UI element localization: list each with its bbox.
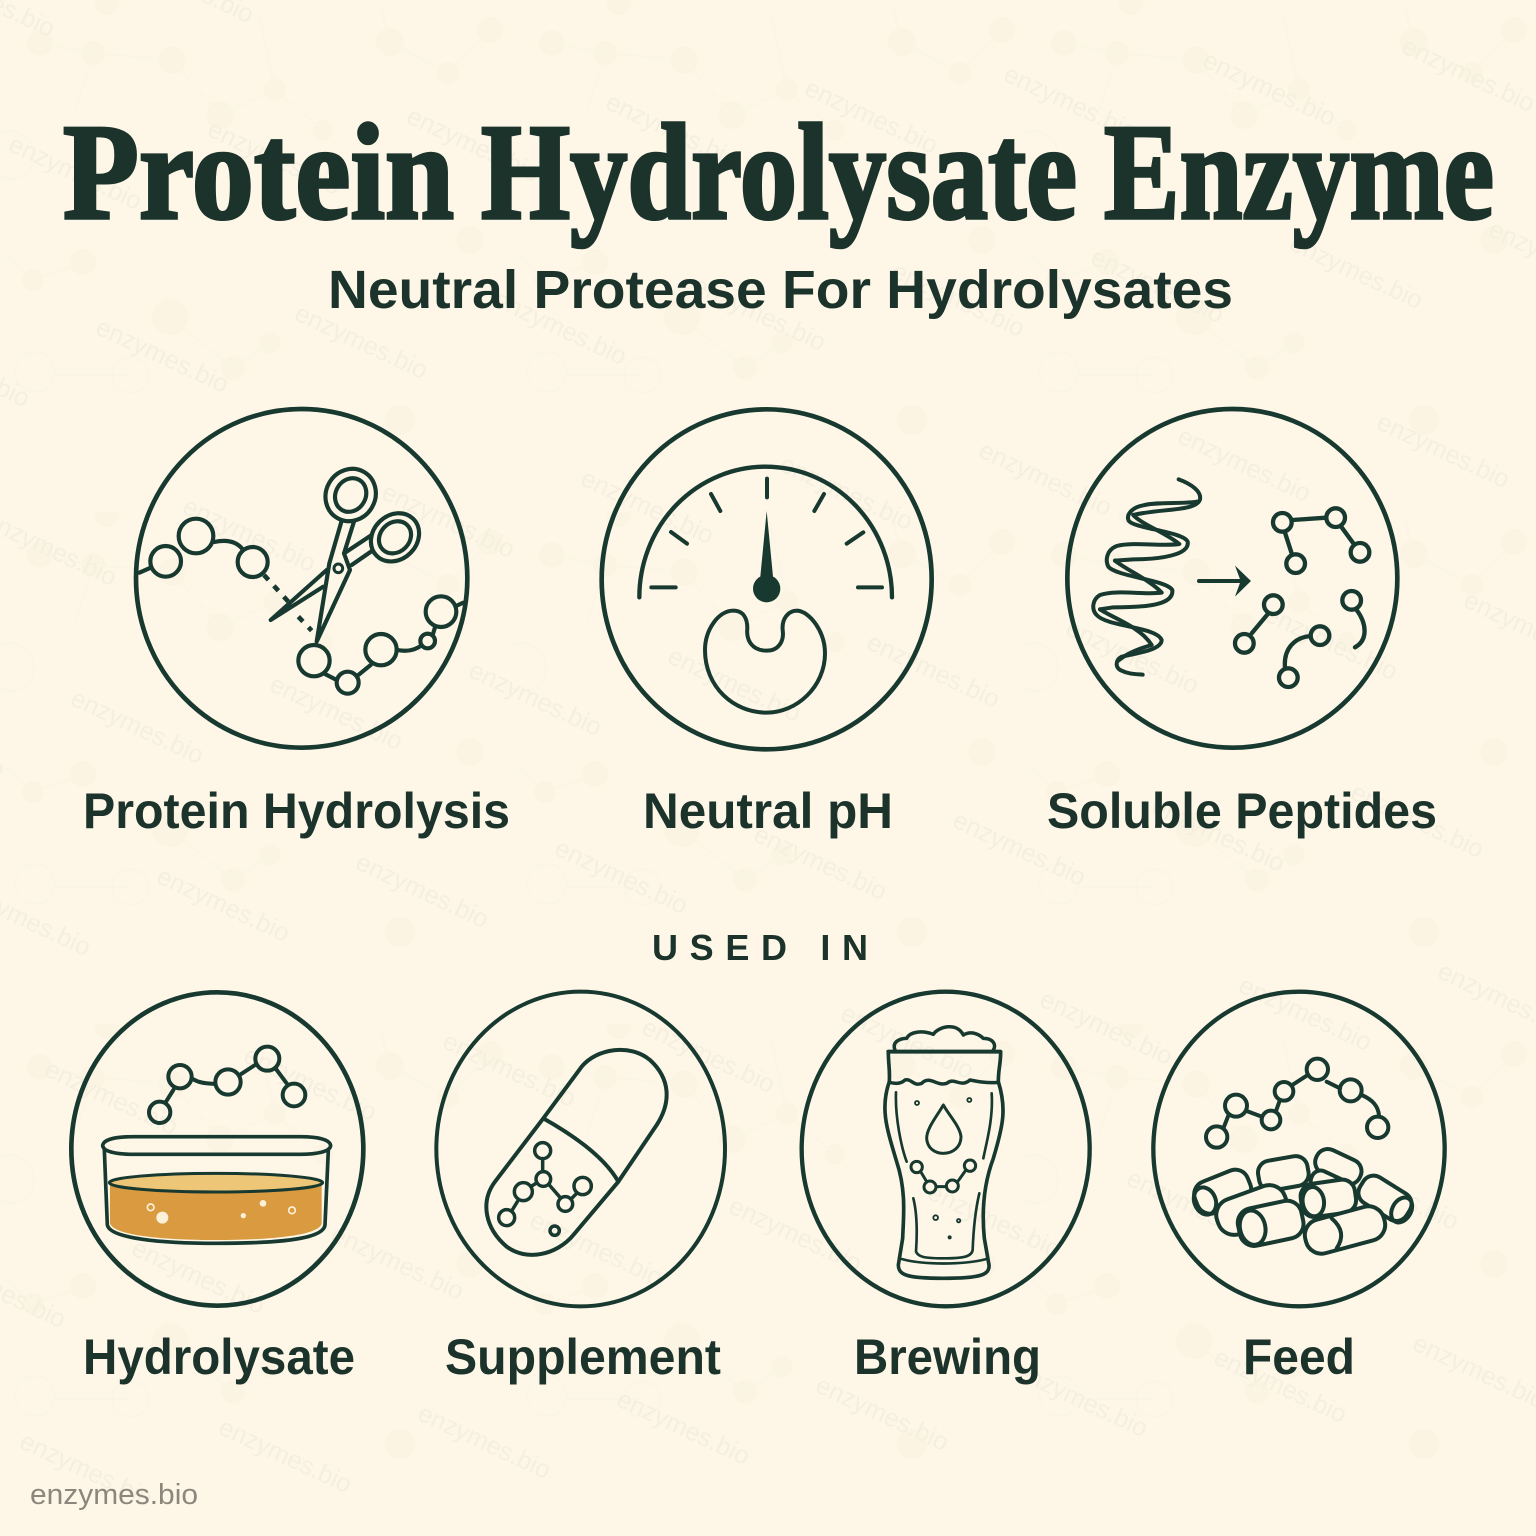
icon: peptide fragments xyxy=(1235,508,1369,687)
icon: peptide chain and bubbles xyxy=(911,1098,976,1239)
repeating watermark text: enzymes.bio xyxy=(351,848,493,934)
repeating watermark text: enzymes.bio xyxy=(1061,614,1203,700)
repeating watermark text: enzymes.bio xyxy=(836,999,978,1085)
repeating watermark text: enzymes.bio xyxy=(1346,778,1488,864)
panel: hydrolysate xyxy=(71,992,363,1306)
repeating watermark text: enzymes.bio xyxy=(525,1206,667,1292)
label: neutral pH: Neutral pH xyxy=(643,783,893,839)
icon: capsule xyxy=(486,1050,667,1255)
repeating watermark text: enzymes.bio xyxy=(999,60,1141,146)
repeating watermark text: enzymes.bio xyxy=(1173,422,1315,508)
panel: protein hydrolysis xyxy=(136,409,467,748)
repeating watermark text: enzymes.bio xyxy=(203,115,345,201)
repeating watermark text: enzymes.bio xyxy=(489,285,631,371)
repeating watermark text: enzymes.bio xyxy=(40,1055,182,1141)
repeating watermark text: enzymes.bio xyxy=(923,1178,1065,1264)
label: soluble peptides: Soluble Peptides xyxy=(1047,783,1437,839)
panel: soluble peptides xyxy=(1067,409,1397,748)
icon: beer glass xyxy=(885,1027,1003,1278)
repeating watermark text: enzymes.bio xyxy=(637,1013,779,1099)
footer brand: enzymes.bio xyxy=(30,1479,198,1511)
repeating watermark text: enzymes.bio xyxy=(290,299,432,385)
icon ring xyxy=(1067,409,1397,748)
repeating watermark text: enzymes.bio xyxy=(66,684,208,770)
repeating watermark text: enzymes.bio xyxy=(688,271,830,357)
label: supplement: Supplement xyxy=(445,1329,721,1385)
repeating watermark text: enzymes.bio xyxy=(1198,46,1340,132)
repeating watermark text: enzymes.bio xyxy=(464,656,606,742)
repeating watermark text: enzymes.bio xyxy=(152,862,294,948)
repeating watermark text: enzymes.bio xyxy=(438,1027,580,1113)
repeating watermark text: enzymes.bio xyxy=(974,436,1116,522)
repeating watermark text: enzymes.bio xyxy=(1285,229,1427,315)
title: Hydrolysate xyxy=(481,96,1077,248)
repeating watermark text: enzymes.bio xyxy=(749,820,891,906)
label: feed: Feed xyxy=(1243,1329,1355,1385)
repeating watermark text: enzymes.bio xyxy=(862,628,1004,714)
repeating watermark text: enzymes.bio xyxy=(1035,985,1177,1071)
repeating watermark text: enzymes.bio xyxy=(1122,1164,1264,1250)
repeating watermark text: enzymes.bio xyxy=(265,670,407,756)
repeating watermark text: enzymes.bio xyxy=(800,74,942,160)
icon: peptide chain xyxy=(139,519,463,694)
panel: feed xyxy=(1153,992,1445,1306)
repeating watermark text: enzymes.bio xyxy=(326,1220,468,1306)
repeating watermark text: enzymes.bio xyxy=(214,1413,356,1499)
label: hydrolysate: Hydrolysate xyxy=(83,1329,355,1385)
repeating watermark text: enzymes.bio xyxy=(127,1234,269,1320)
icon: peptide chain xyxy=(149,1047,305,1123)
repeating watermark text: enzymes.bio xyxy=(1209,1343,1351,1429)
label: protein hydrolysis: Protein Hydrolysis xyxy=(83,783,510,839)
repeating watermark text: enzymes.bio xyxy=(724,1192,866,1278)
icon ring xyxy=(602,409,932,749)
icon: peptide chain xyxy=(1206,1059,1388,1148)
repeating watermark text: enzymes.bio xyxy=(402,102,544,188)
section heading: used in: USED IN xyxy=(652,927,868,968)
repeating watermark text: enzymes.bio xyxy=(663,642,805,728)
repeating watermark text: enzymes.bio xyxy=(811,1371,953,1457)
icon: dish with liquid xyxy=(103,1137,331,1243)
repeating watermark text: enzymes.bio xyxy=(15,1427,157,1513)
arrow xyxy=(1199,566,1251,597)
repeating watermark text: enzymes.bio xyxy=(601,88,743,174)
panel: neutral pH xyxy=(602,409,932,749)
repeating watermark text: enzymes.bio xyxy=(1260,600,1402,686)
icon: protein ribbon xyxy=(1093,479,1200,675)
icon ring xyxy=(436,992,725,1306)
icon: droplet xyxy=(927,1105,961,1153)
title: Protein xyxy=(63,96,454,248)
repeating watermark text: enzymes.bio xyxy=(1321,1150,1463,1236)
repeating watermark text: enzymes.bio xyxy=(91,313,233,399)
repeating watermark text: enzymes.bio xyxy=(1372,408,1514,494)
repeating watermark text: enzymes.bio xyxy=(1397,32,1536,118)
icon ring xyxy=(71,992,363,1306)
icon: scissors xyxy=(271,460,429,642)
repeating watermark text: enzymes.bio xyxy=(775,450,917,536)
repeating watermark text: enzymes.bio xyxy=(1010,1357,1152,1443)
panel: supplement xyxy=(436,992,725,1306)
repeating watermark text: enzymes.bio xyxy=(887,257,1029,343)
repeating watermark text: enzymes.bio xyxy=(1147,792,1289,878)
icon: enzyme xyxy=(705,611,825,713)
label: brewing: Brewing xyxy=(854,1329,1041,1385)
repeating watermark text: enzymes.bio xyxy=(576,464,718,550)
repeating watermark text: enzymes.bio xyxy=(948,806,1090,892)
repeating watermark text: enzymes.bio xyxy=(1234,971,1376,1057)
icon ring xyxy=(136,409,467,748)
icon ring xyxy=(1153,992,1445,1306)
repeating watermark text: enzymes.bio xyxy=(377,478,519,564)
repeating watermark text: enzymes.bio xyxy=(239,1041,381,1127)
icon ring xyxy=(802,992,1090,1306)
repeating watermark text: enzymes.bio xyxy=(413,1399,555,1485)
title xyxy=(63,96,1494,248)
repeating watermark text: enzymes.bio xyxy=(1086,243,1228,329)
icon: molecule in capsule xyxy=(499,1143,591,1235)
subtitle: Neutral Protease For Hydrolysates xyxy=(328,260,1233,320)
icon: feed pellets xyxy=(1190,1145,1416,1257)
repeating watermark text: enzymes.bio xyxy=(178,492,320,578)
repeating watermark text: enzymes.bio xyxy=(612,1385,754,1471)
repeating watermark text: enzymes.bio xyxy=(4,130,146,216)
icon: gauge xyxy=(639,467,892,602)
panel: brewing xyxy=(802,992,1090,1306)
repeating watermark text: enzymes.bio xyxy=(550,834,692,920)
